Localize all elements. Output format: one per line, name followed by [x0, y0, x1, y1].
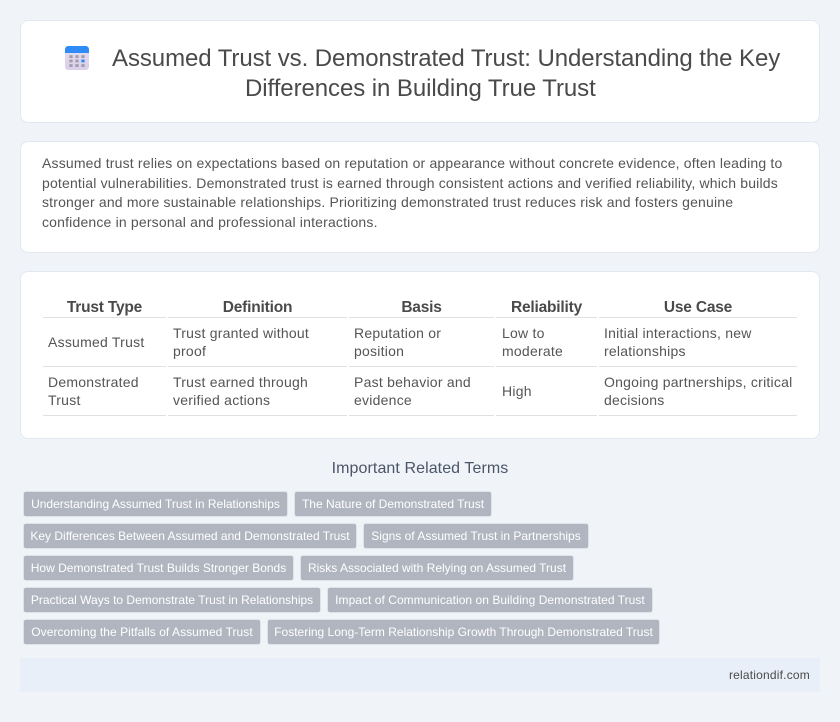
tag: Risks Associated with Relying on Assumed Trust: [308, 561, 566, 575]
title: Differences in Building True Trust: [245, 74, 596, 102]
summary text: potential vulnerabilities. Demonstrated trust is earned through consistent actions and verified reliability, which builds: [42, 174, 778, 190]
tag: Overcoming the Pitfalls of Assumed Trust: [31, 625, 253, 639]
table row: demonstrated trust: High: [502, 383, 532, 399]
tag: [23, 619, 261, 645]
tag: [327, 587, 653, 613]
table row: assumed trust: Assumed Trust: [48, 334, 144, 350]
table row: demonstrated trust: verified actions: [173, 392, 270, 408]
table row: assumed trust: Low to: [502, 325, 545, 341]
tag: The Nature of Demonstrated Trust: [302, 497, 484, 511]
tag: Practical Ways to Demonstrate Trust in Relationships: [31, 593, 313, 607]
table row: demonstrated trust: evidence: [354, 392, 412, 408]
table header row: Trust Type: [67, 299, 142, 316]
heading: related terms: Important Related Terms: [332, 460, 508, 477]
summary text: [42, 155, 782, 230]
table header row: Definition: [223, 299, 292, 316]
table row: assumed trust: relationships: [604, 343, 686, 359]
summary text: stronger and more sustainable relationships. Prioritizing demonstrated trust reduces risk and fosters genuine: [42, 194, 733, 210]
footer source text: relationdif.com: [729, 668, 810, 682]
panel: header: [20, 20, 820, 123]
tag: How Demonstrated Trust Builds Stronger Bonds: [31, 561, 286, 575]
table header row: [43, 299, 797, 318]
title: Assumed Trust vs. Demonstrated Trust: Understanding the Key: [112, 45, 780, 72]
table row: demonstrated trust: Ongoing partnerships, critical: [604, 374, 793, 390]
title: [112, 45, 780, 102]
panel: related term tags: [23, 491, 660, 645]
table row: assumed trust: Initial interactions, new: [604, 325, 752, 341]
table row: assumed trust: proof: [173, 343, 206, 359]
tag: Fostering Long-Term Relationship Growth Through Demonstrated Trust: [274, 625, 653, 639]
tag: [23, 555, 294, 581]
tag: [267, 619, 660, 645]
table header row: Reliability: [511, 299, 582, 316]
footer: [20, 658, 820, 692]
summary text: Assumed trust relies on expectations based on reputation or appearance without concrete evidence, often leading to: [42, 155, 782, 171]
tag: Impact of Communication on Building Demonstrated Trust: [335, 593, 645, 607]
table row: assumed trust: moderate: [502, 343, 563, 359]
table header row: Use Case: [664, 299, 732, 316]
tag: [363, 523, 589, 549]
table row: demonstrated trust: [43, 374, 797, 416]
tag: Key Differences Between Assumed and Demonstrated Trust: [30, 529, 350, 543]
table row: assumed trust: [43, 325, 797, 367]
tag: [300, 555, 574, 581]
table row: demonstrated trust: Demonstrated: [48, 374, 139, 390]
table row: assumed trust: Reputation or: [354, 325, 441, 341]
tag: [294, 491, 492, 517]
table row: demonstrated trust: Trust earned through: [173, 374, 308, 390]
table row: demonstrated trust: Trust: [48, 392, 81, 408]
summary text: confidence in personal and professional interactions.: [42, 214, 378, 230]
table header row: Basis: [401, 299, 442, 316]
table row: assumed trust: Trust granted without: [173, 325, 309, 341]
table row: assumed trust: position: [354, 343, 404, 359]
icon: calendar: [65, 46, 89, 70]
tag: Signs of Assumed Trust in Partnerships: [371, 529, 581, 543]
panel: summary paragraph: [20, 141, 820, 253]
tag: [23, 587, 321, 613]
tag: Understanding Assumed Trust in Relationships: [31, 497, 280, 511]
tag: [23, 523, 357, 549]
tag: [23, 491, 288, 517]
table row: demonstrated trust: Past behavior and: [354, 374, 471, 390]
panel: comparison table: [20, 271, 820, 439]
table row: demonstrated trust: decisions: [604, 392, 665, 408]
